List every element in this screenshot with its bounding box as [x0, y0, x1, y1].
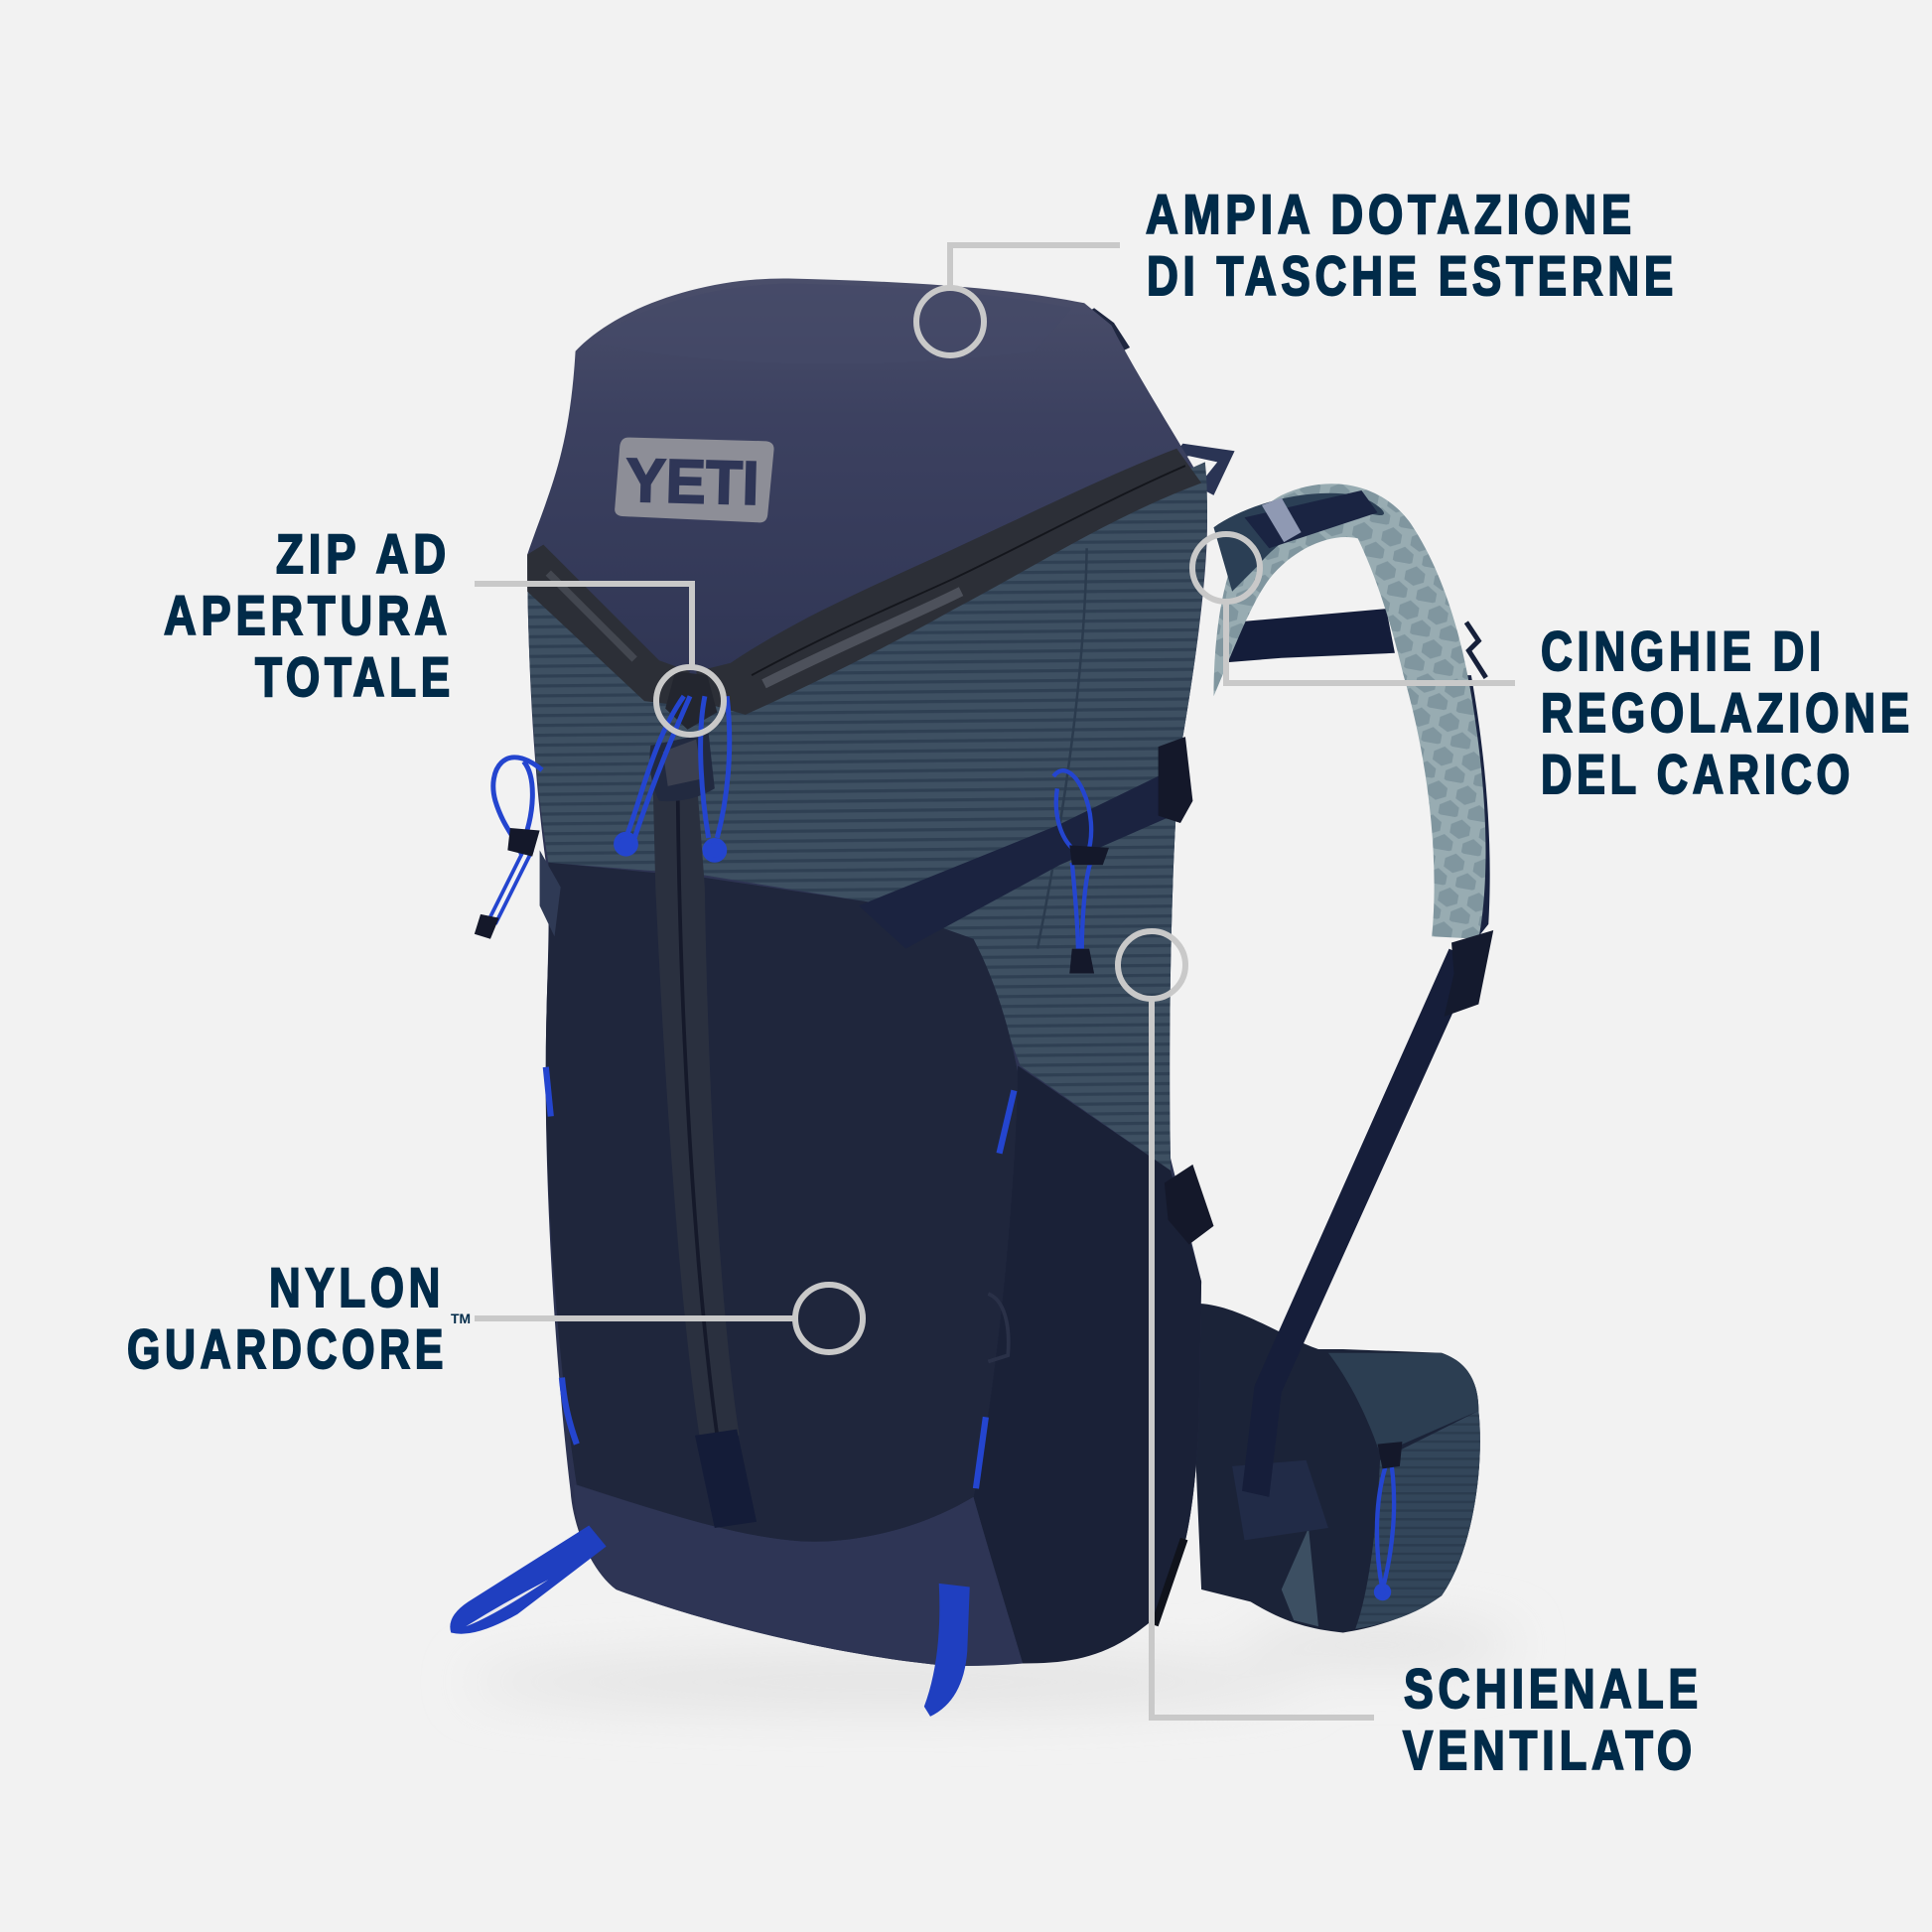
- callout: nylon guardcore: [127, 1256, 863, 1380]
- blue trims: [546, 1067, 1014, 1488]
- hip cord loop: [1377, 1453, 1394, 1589]
- marker ring: [656, 667, 724, 735]
- shoulder strap mesh: [1213, 483, 1490, 939]
- blue pull loops: [450, 1525, 970, 1717]
- label text: APERTURA: [164, 584, 452, 646]
- leader line: [475, 1315, 795, 1321]
- blue cords: [486, 696, 1394, 1598]
- label text: AMPIA DOTAZIONE: [1146, 183, 1636, 245]
- logo text: YETI: [625, 447, 759, 518]
- bottom band: [574, 1485, 1023, 1666]
- top lid highlight: [589, 283, 1072, 364]
- zip pull and tab: [649, 671, 717, 801]
- leader line: [475, 584, 692, 667]
- leader line: [950, 245, 1120, 288]
- lower side panel: [973, 1066, 1201, 1663]
- leader line: [1226, 602, 1515, 683]
- right side cord loop: [1053, 770, 1091, 955]
- zip band: [527, 449, 1201, 715]
- backpack illustration: [450, 278, 1516, 1717]
- left side cord loop: [493, 758, 542, 850]
- front vertical zip: [653, 788, 757, 1528]
- marker ring: [795, 1285, 863, 1352]
- webbing strap and side buckles: [540, 737, 1213, 1245]
- label text: [164, 522, 455, 708]
- label text: GUARDCORE: [127, 1317, 448, 1380]
- label text: TOTALE: [255, 645, 455, 708]
- callout: cinghie di regolazione: [1192, 534, 1914, 805]
- load lifter black strap: [1220, 609, 1395, 663]
- outer navy edge: [1463, 675, 1490, 936]
- callout: zip ad apertura totale: [164, 522, 724, 735]
- label text: SCHIENALE: [1404, 1657, 1703, 1720]
- striped mid panel: [527, 462, 1207, 1171]
- cord stoppers: [475, 828, 1402, 1468]
- label text: [127, 1256, 471, 1380]
- hip belt: [1189, 1304, 1480, 1632]
- main body: [527, 278, 1207, 1666]
- side lower strap and buckle: [1242, 930, 1493, 1497]
- label text: ZIP AD: [276, 522, 451, 585]
- leader line: [1152, 999, 1374, 1718]
- side pocket detail: [988, 1294, 1009, 1361]
- marker ring: [916, 288, 984, 355]
- marker ring: [1192, 534, 1260, 602]
- ground shadow: [469, 1623, 1516, 1709]
- label text: CINGHIE DI: [1541, 620, 1826, 682]
- callout: schienale ventilato: [1118, 931, 1703, 1781]
- small toggle on strap: [1466, 622, 1486, 678]
- side seam: [1037, 548, 1087, 949]
- label text: NYLON: [269, 1256, 445, 1318]
- label text: [1146, 183, 1678, 307]
- zip pull cords: [625, 696, 690, 838]
- label text: TM: [451, 1311, 471, 1326]
- strap channel: [1213, 493, 1384, 592]
- top handle tabs: [1047, 308, 1235, 495]
- mesh arc: [1213, 483, 1485, 939]
- label text: DI TASCHE ESTERNE: [1147, 244, 1678, 307]
- lower front panel: [546, 863, 1018, 1542]
- label text: [1403, 1657, 1703, 1781]
- logo badge: [615, 438, 774, 522]
- label text: VENTILATO: [1403, 1719, 1697, 1781]
- callout: ampia dotazione: [916, 183, 1678, 355]
- label tag: [1151, 1538, 1187, 1626]
- marker ring: [1118, 931, 1185, 999]
- label text: [1541, 620, 1914, 805]
